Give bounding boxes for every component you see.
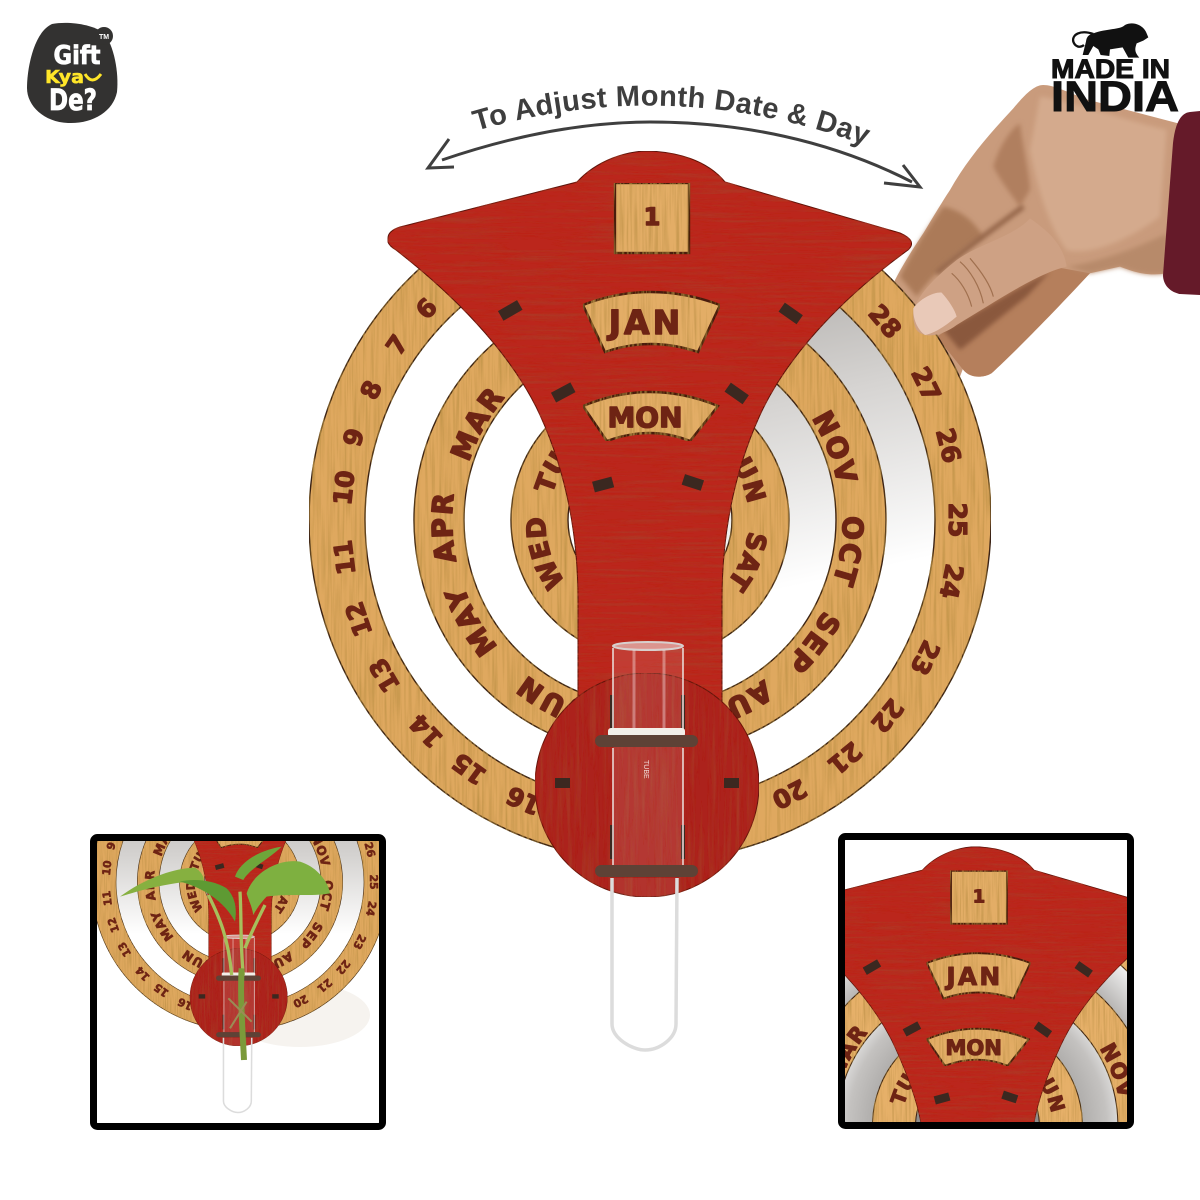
date labels: 8 bbox=[354, 376, 388, 404]
inset labels: MAR bbox=[152, 841, 168, 856]
inset labels: APR bbox=[144, 870, 156, 900]
inset labels: 13 bbox=[115, 940, 134, 959]
date window number: 1 bbox=[644, 203, 660, 231]
close-up window labels bbox=[944, 887, 1003, 1060]
date labels bbox=[328, 292, 972, 821]
month labels: APR bbox=[430, 494, 457, 562]
inset labels: 15 bbox=[152, 980, 171, 1000]
close-up ring labels: DEC bbox=[1017, 967, 1079, 1017]
month labels: MAR bbox=[450, 388, 506, 461]
close-up ring labels: NOV bbox=[1100, 1042, 1127, 1094]
made in india badge bbox=[1051, 23, 1179, 121]
inset labels: AUG bbox=[274, 951, 292, 968]
inset labels: 11 bbox=[100, 890, 115, 907]
date labels: 21 bbox=[822, 736, 867, 780]
hand: thumb over the ring bbox=[913, 218, 1067, 335]
crease between finger and thumb bbox=[937, 207, 1023, 273]
icon: lion bbox=[1073, 23, 1148, 58]
month labels bbox=[430, 271, 882, 775]
date labels: 13 bbox=[363, 653, 406, 697]
logo: Gift Kya De: Kya bbox=[45, 67, 84, 88]
thumb knuckle wrinkles bbox=[952, 258, 993, 307]
close-up window labels: JAN bbox=[944, 962, 1003, 991]
middle finger bbox=[937, 267, 1090, 377]
knuckle shade bbox=[993, 123, 1030, 207]
date labels: 23 bbox=[904, 636, 946, 680]
logo: Gift Kya De: Gift bbox=[54, 41, 100, 71]
date labels: 24 bbox=[934, 561, 969, 601]
date labels: 25 bbox=[943, 503, 972, 537]
inset labels: 26 bbox=[361, 841, 378, 859]
close-up window labels: MON bbox=[945, 1035, 1002, 1060]
close-up ring labels: TUE bbox=[889, 1072, 912, 1103]
weekday labels bbox=[526, 450, 767, 594]
date labels: 28 bbox=[863, 299, 907, 344]
made in india badge: MADE IN bbox=[1051, 54, 1170, 84]
inset labels: JUN bbox=[182, 950, 208, 968]
month labels: NOV bbox=[812, 410, 858, 480]
date labels: 14 bbox=[404, 708, 449, 753]
glass test tube: TUBE bbox=[642, 760, 649, 779]
heading: to adjust month date and day: To Adjust Month Date & Day bbox=[470, 86, 870, 148]
calendar rings bbox=[309, 268, 991, 850]
inset: plant in tube bbox=[97, 841, 379, 1114]
date labels: 11 bbox=[328, 538, 361, 577]
close-up window labels: 1 bbox=[973, 887, 985, 908]
inset frame left bbox=[94, 838, 382, 1126]
inset shadow bbox=[260, 990, 370, 1047]
inset labels: SEP bbox=[302, 922, 322, 948]
date labels: 10 bbox=[328, 469, 360, 507]
inset labels: 23 bbox=[350, 932, 369, 951]
date labels: 16 bbox=[502, 780, 546, 821]
date labels: 6 bbox=[410, 292, 443, 325]
plant bbox=[120, 847, 330, 1060]
date labels: 12 bbox=[340, 598, 378, 640]
made in india badge: INDIA bbox=[1051, 73, 1179, 121]
date labels: 27 bbox=[905, 362, 947, 406]
inset labels: 10 bbox=[100, 859, 114, 876]
date labels: 22 bbox=[865, 693, 910, 738]
glass test tube bbox=[595, 642, 698, 1050]
inset labels: 22 bbox=[333, 957, 353, 977]
weekday labels: SUN bbox=[738, 456, 767, 502]
logo: Gift Kya De: De? bbox=[49, 83, 97, 117]
inset labels: OCT bbox=[320, 880, 334, 912]
inset labels: MAY bbox=[150, 913, 174, 942]
inset: close-up of calendar face bbox=[845, 846, 1127, 1122]
inset labels: 21 bbox=[315, 976, 335, 995]
date labels: 26 bbox=[930, 425, 967, 466]
date labels: 15 bbox=[447, 747, 492, 791]
inset frame right bbox=[842, 836, 1130, 1126]
wrist underside bbox=[1067, 233, 1167, 274]
month window label: JAN bbox=[607, 303, 683, 342]
month labels: OCT bbox=[834, 516, 864, 588]
shadow in gaps on right side bbox=[650, 235, 935, 805]
month labels: AUG bbox=[728, 678, 770, 719]
close-up ring labels bbox=[845, 1026, 1127, 1112]
inset labels bbox=[102, 834, 382, 1044]
close-up ring labels: MAR bbox=[845, 1026, 868, 1068]
inset labels: NOV bbox=[313, 841, 331, 865]
inset labels: 16 bbox=[176, 995, 195, 1013]
inset labels: 25 bbox=[367, 874, 380, 890]
month labels: MAY bbox=[443, 592, 497, 658]
weekday labels: TUE bbox=[533, 450, 560, 490]
logo: Gift Kya De bbox=[27, 23, 117, 123]
sleeve cuff bbox=[1163, 111, 1200, 295]
inset labels: WED bbox=[186, 884, 202, 914]
arrow: adjust direction bbox=[428, 122, 920, 187]
day window label: MON bbox=[607, 401, 683, 434]
weekday labels: WED bbox=[526, 518, 563, 592]
date labels: 9 bbox=[338, 425, 370, 450]
inset labels: 20 bbox=[291, 992, 310, 1010]
round tube holder bbox=[535, 673, 759, 897]
inset labels: 24 bbox=[363, 900, 379, 918]
date labels: 7 bbox=[380, 330, 414, 360]
red calendar face bbox=[388, 151, 912, 720]
index finger shade bbox=[900, 207, 983, 297]
logo: Gift Kya De: TM bbox=[99, 34, 109, 41]
month labels: DEC bbox=[702, 311, 785, 378]
inset labels: TUE bbox=[189, 852, 201, 868]
month labels: JUN bbox=[516, 676, 576, 718]
thumb nail bbox=[913, 293, 957, 335]
hand: fingers behind the ring bbox=[893, 85, 1178, 377]
inset labels: 12 bbox=[105, 916, 122, 934]
close-up ring labels: SUN bbox=[1043, 1077, 1066, 1112]
inset labels: 14 bbox=[133, 963, 153, 984]
month labels: SEP bbox=[794, 612, 840, 672]
weekday labels: SAT bbox=[730, 532, 767, 594]
date labels: 20 bbox=[768, 773, 812, 815]
lit back of hand bbox=[1030, 97, 1167, 251]
inset labels: SAT bbox=[274, 895, 290, 914]
inset labels: 9 bbox=[104, 841, 119, 851]
